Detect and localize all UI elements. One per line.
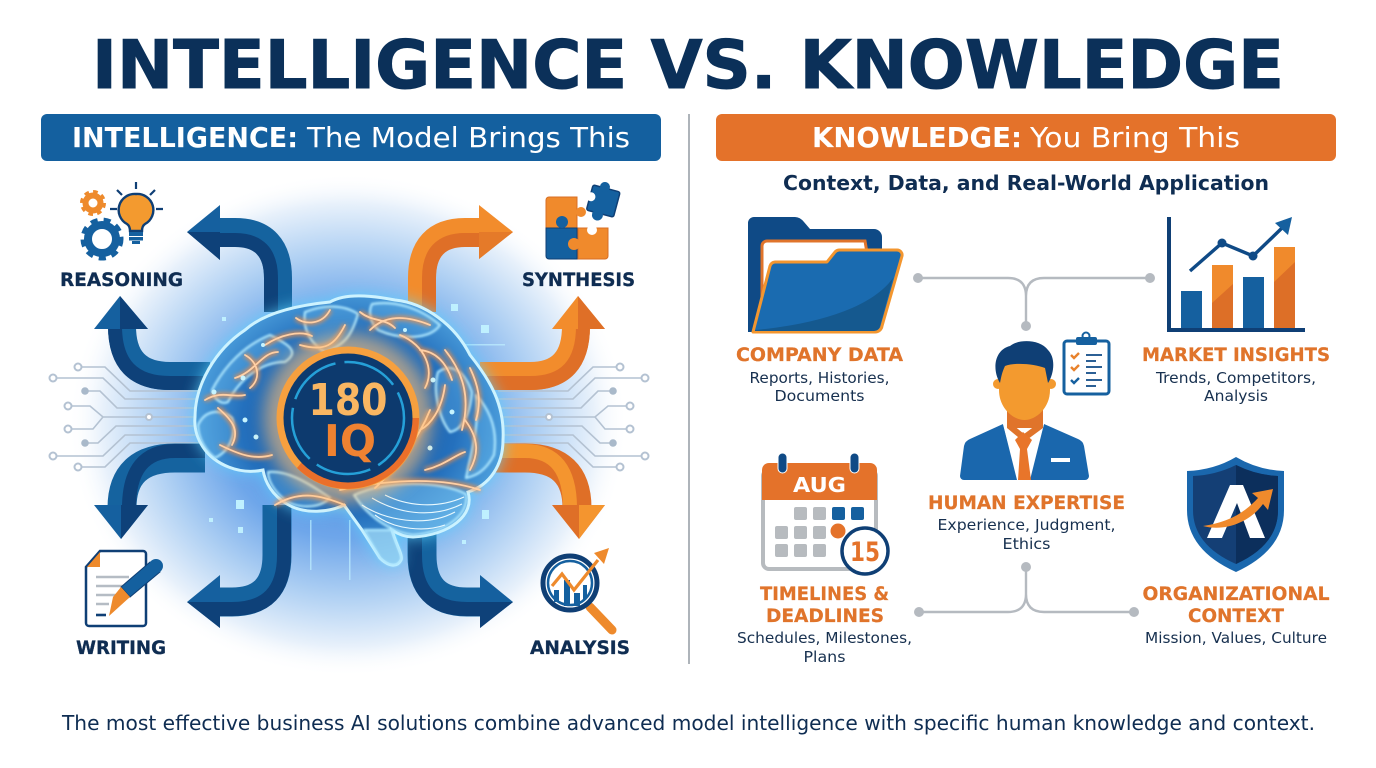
label: human expertise: Experience, Judgment, xyxy=(938,516,1116,534)
icon: synthesis puzzle xyxy=(546,178,622,259)
heading banner: intelligence xyxy=(41,114,661,161)
arrow: to writing lower xyxy=(187,505,284,628)
label: market insights: Trends, Competitors, xyxy=(1155,369,1316,387)
label: organizational context: ORGANIZATIONAL xyxy=(1142,583,1330,605)
icon: clipboard xyxy=(1064,332,1109,394)
brain vein glow xyxy=(205,310,480,505)
IQ badge xyxy=(264,334,432,502)
brain body xyxy=(195,296,503,565)
arrow: to analysis upper xyxy=(490,451,605,539)
label: timelines and deadlines xyxy=(737,583,912,666)
icon: analysis magnifier xyxy=(543,548,612,630)
icon: folder xyxy=(748,217,902,332)
arrow: to reasoning upper xyxy=(187,205,278,312)
title: INTELLIGENCE VS. KNOWLEDGE xyxy=(92,26,1284,104)
circuit lines right xyxy=(498,364,648,470)
IQ badge: 180 xyxy=(308,375,388,426)
icon: calendar: AUG xyxy=(793,473,846,497)
panel: knowledge xyxy=(716,114,1336,666)
heading banner: knowledge: KNOWLEDGE: xyxy=(812,121,1022,154)
heading banner: knowledge: You Bring This xyxy=(1029,121,1240,154)
label: human expertise: Ethics xyxy=(1002,535,1051,553)
icon: reasoning xyxy=(82,182,163,258)
label: synthesis: SYNTHESIS xyxy=(522,270,635,291)
brain veins xyxy=(205,310,480,505)
footer statement: The most effective business AI solutions combine advanced model intelligence with specific human knowledge and context. xyxy=(61,711,1315,735)
label: human expertise: HUMAN EXPERTISE xyxy=(928,492,1125,514)
label: market insights: MARKET INSIGHTS xyxy=(1142,344,1330,366)
icon: calendar: 15 xyxy=(850,537,880,568)
label: organizational context xyxy=(1142,583,1330,647)
label: company data: Documents xyxy=(774,387,865,405)
blue puzzle piece xyxy=(581,178,622,224)
IQ badge: IQ xyxy=(324,416,376,467)
label: company data: Reports, Histories, xyxy=(750,369,890,387)
label: analysis: ANALYSIS xyxy=(530,638,630,659)
icon: market chart xyxy=(1169,217,1305,330)
label: timelines and deadlines: DEADLINES xyxy=(766,605,884,627)
brain cerebellum striations xyxy=(362,495,464,529)
background glow xyxy=(68,173,628,677)
brain outer glow xyxy=(195,296,503,565)
label: timelines and deadlines: TIMELINES & xyxy=(760,583,889,605)
heading banner: knowledge xyxy=(716,114,1336,161)
label: company data: COMPANY DATA xyxy=(736,344,903,366)
heading banner: intelligence: INTELLIGENCE: xyxy=(72,121,298,154)
subheading: Context, Data, and Real-World Application xyxy=(783,171,1269,195)
arrow: to writing upper xyxy=(94,451,205,539)
brain synapse dots xyxy=(212,328,454,450)
label: organizational context: Mission, Values, Culture xyxy=(1145,629,1327,647)
label: timelines and deadlines: Plans xyxy=(804,648,846,666)
brain lobes xyxy=(198,303,495,565)
circuit lines left xyxy=(50,364,200,470)
icon: calendar xyxy=(762,453,888,574)
arrow: to synthesis lower xyxy=(480,296,605,383)
heading banner: intelligence: The Model Brings This xyxy=(306,121,630,154)
label: writing: WRITING xyxy=(76,638,166,659)
panel divider xyxy=(688,114,690,664)
arrow: to reasoning lower xyxy=(94,296,210,383)
icon: shield xyxy=(1187,457,1284,572)
label: timelines and deadlines: Schedules, Milestones, xyxy=(737,629,912,647)
brain xyxy=(195,296,503,565)
label: company data xyxy=(736,344,903,405)
arrow: to synthesis upper xyxy=(422,205,513,312)
icon: writing document and pen xyxy=(86,551,163,626)
icon: person xyxy=(960,341,1089,480)
label: human expertise xyxy=(928,492,1125,553)
label: market insights xyxy=(1142,344,1330,405)
sparkle particles xyxy=(209,304,505,580)
connector: bottom xyxy=(914,562,1139,617)
connector: top xyxy=(913,273,1155,331)
label: organizational context: CONTEXT xyxy=(1188,605,1284,627)
label: reasoning: REASONING xyxy=(60,270,183,291)
arrow: to analysis lower xyxy=(415,530,513,628)
label: market insights: Analysis xyxy=(1204,387,1268,405)
panel: intelligence xyxy=(41,114,661,677)
